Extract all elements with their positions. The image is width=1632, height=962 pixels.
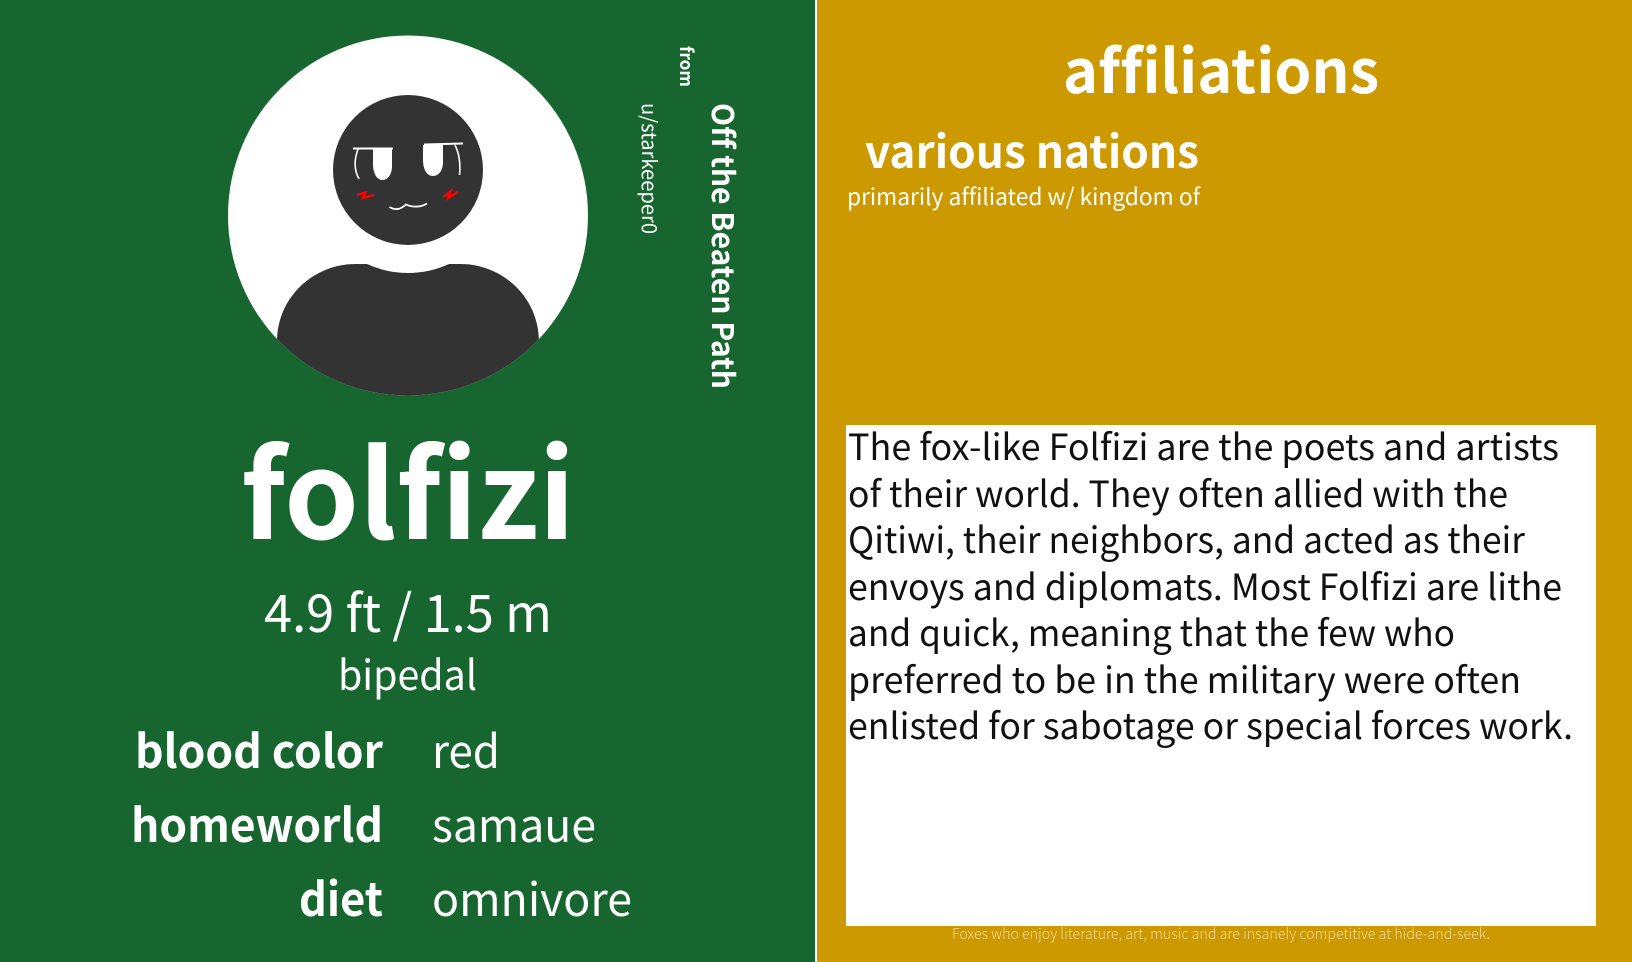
rotated credit: author: u/starkeeper0 [636, 103, 665, 234]
portrait avatar [228, 36, 588, 400]
stat: blood color: red [432, 716, 500, 782]
description panel [846, 419, 1596, 926]
body plan: bipedal [338, 642, 477, 702]
description text: The fox-like Folfizi are the poets and artists [848, 419, 1559, 471]
stat: homeworld: homeworld [131, 790, 383, 856]
description text: enlisted for sabotage or special forces work. [848, 698, 1573, 750]
heading: affiliations: affiliations [1063, 24, 1379, 111]
description text: preferred to be in the military were often [848, 652, 1521, 704]
description text [848, 419, 1573, 750]
affiliation note: primarily affiliated w/ kingdom of [847, 178, 1201, 212]
avatar head with face [333, 95, 483, 245]
stat: blood color: blood color [135, 716, 384, 782]
height: 4.9 ft / 1.5 m [264, 572, 552, 647]
species name: folfizi [241, 399, 575, 574]
panel: left green profile [0, 0, 815, 962]
stat: diet [299, 864, 632, 930]
description text: Qitiwi, their neighbors, and acted as their [848, 512, 1526, 564]
stat: diet: omnivore [432, 864, 632, 930]
panel: right gold affiliations [817, 0, 1632, 962]
avatar body [277, 264, 539, 400]
rotated credit: source title: Off the Beaten Path [703, 103, 747, 389]
rotated credit: from: from [674, 46, 700, 87]
description text: and quick, meaning that the few who [848, 605, 1455, 657]
stat: homeworld [131, 790, 596, 856]
description text: of their world. They often allied with the [848, 466, 1508, 518]
stat: homeworld: samaue [432, 790, 596, 856]
stat: diet: diet [299, 864, 383, 930]
description text: envoys and diplomats. Most Folfizi are lithe [848, 559, 1562, 611]
subheading: various nations: various nations [865, 116, 1199, 181]
footer tagline: Foxes who enjoy literature, art, music and are insanely competitive at hide-and-seek. [952, 923, 1490, 944]
